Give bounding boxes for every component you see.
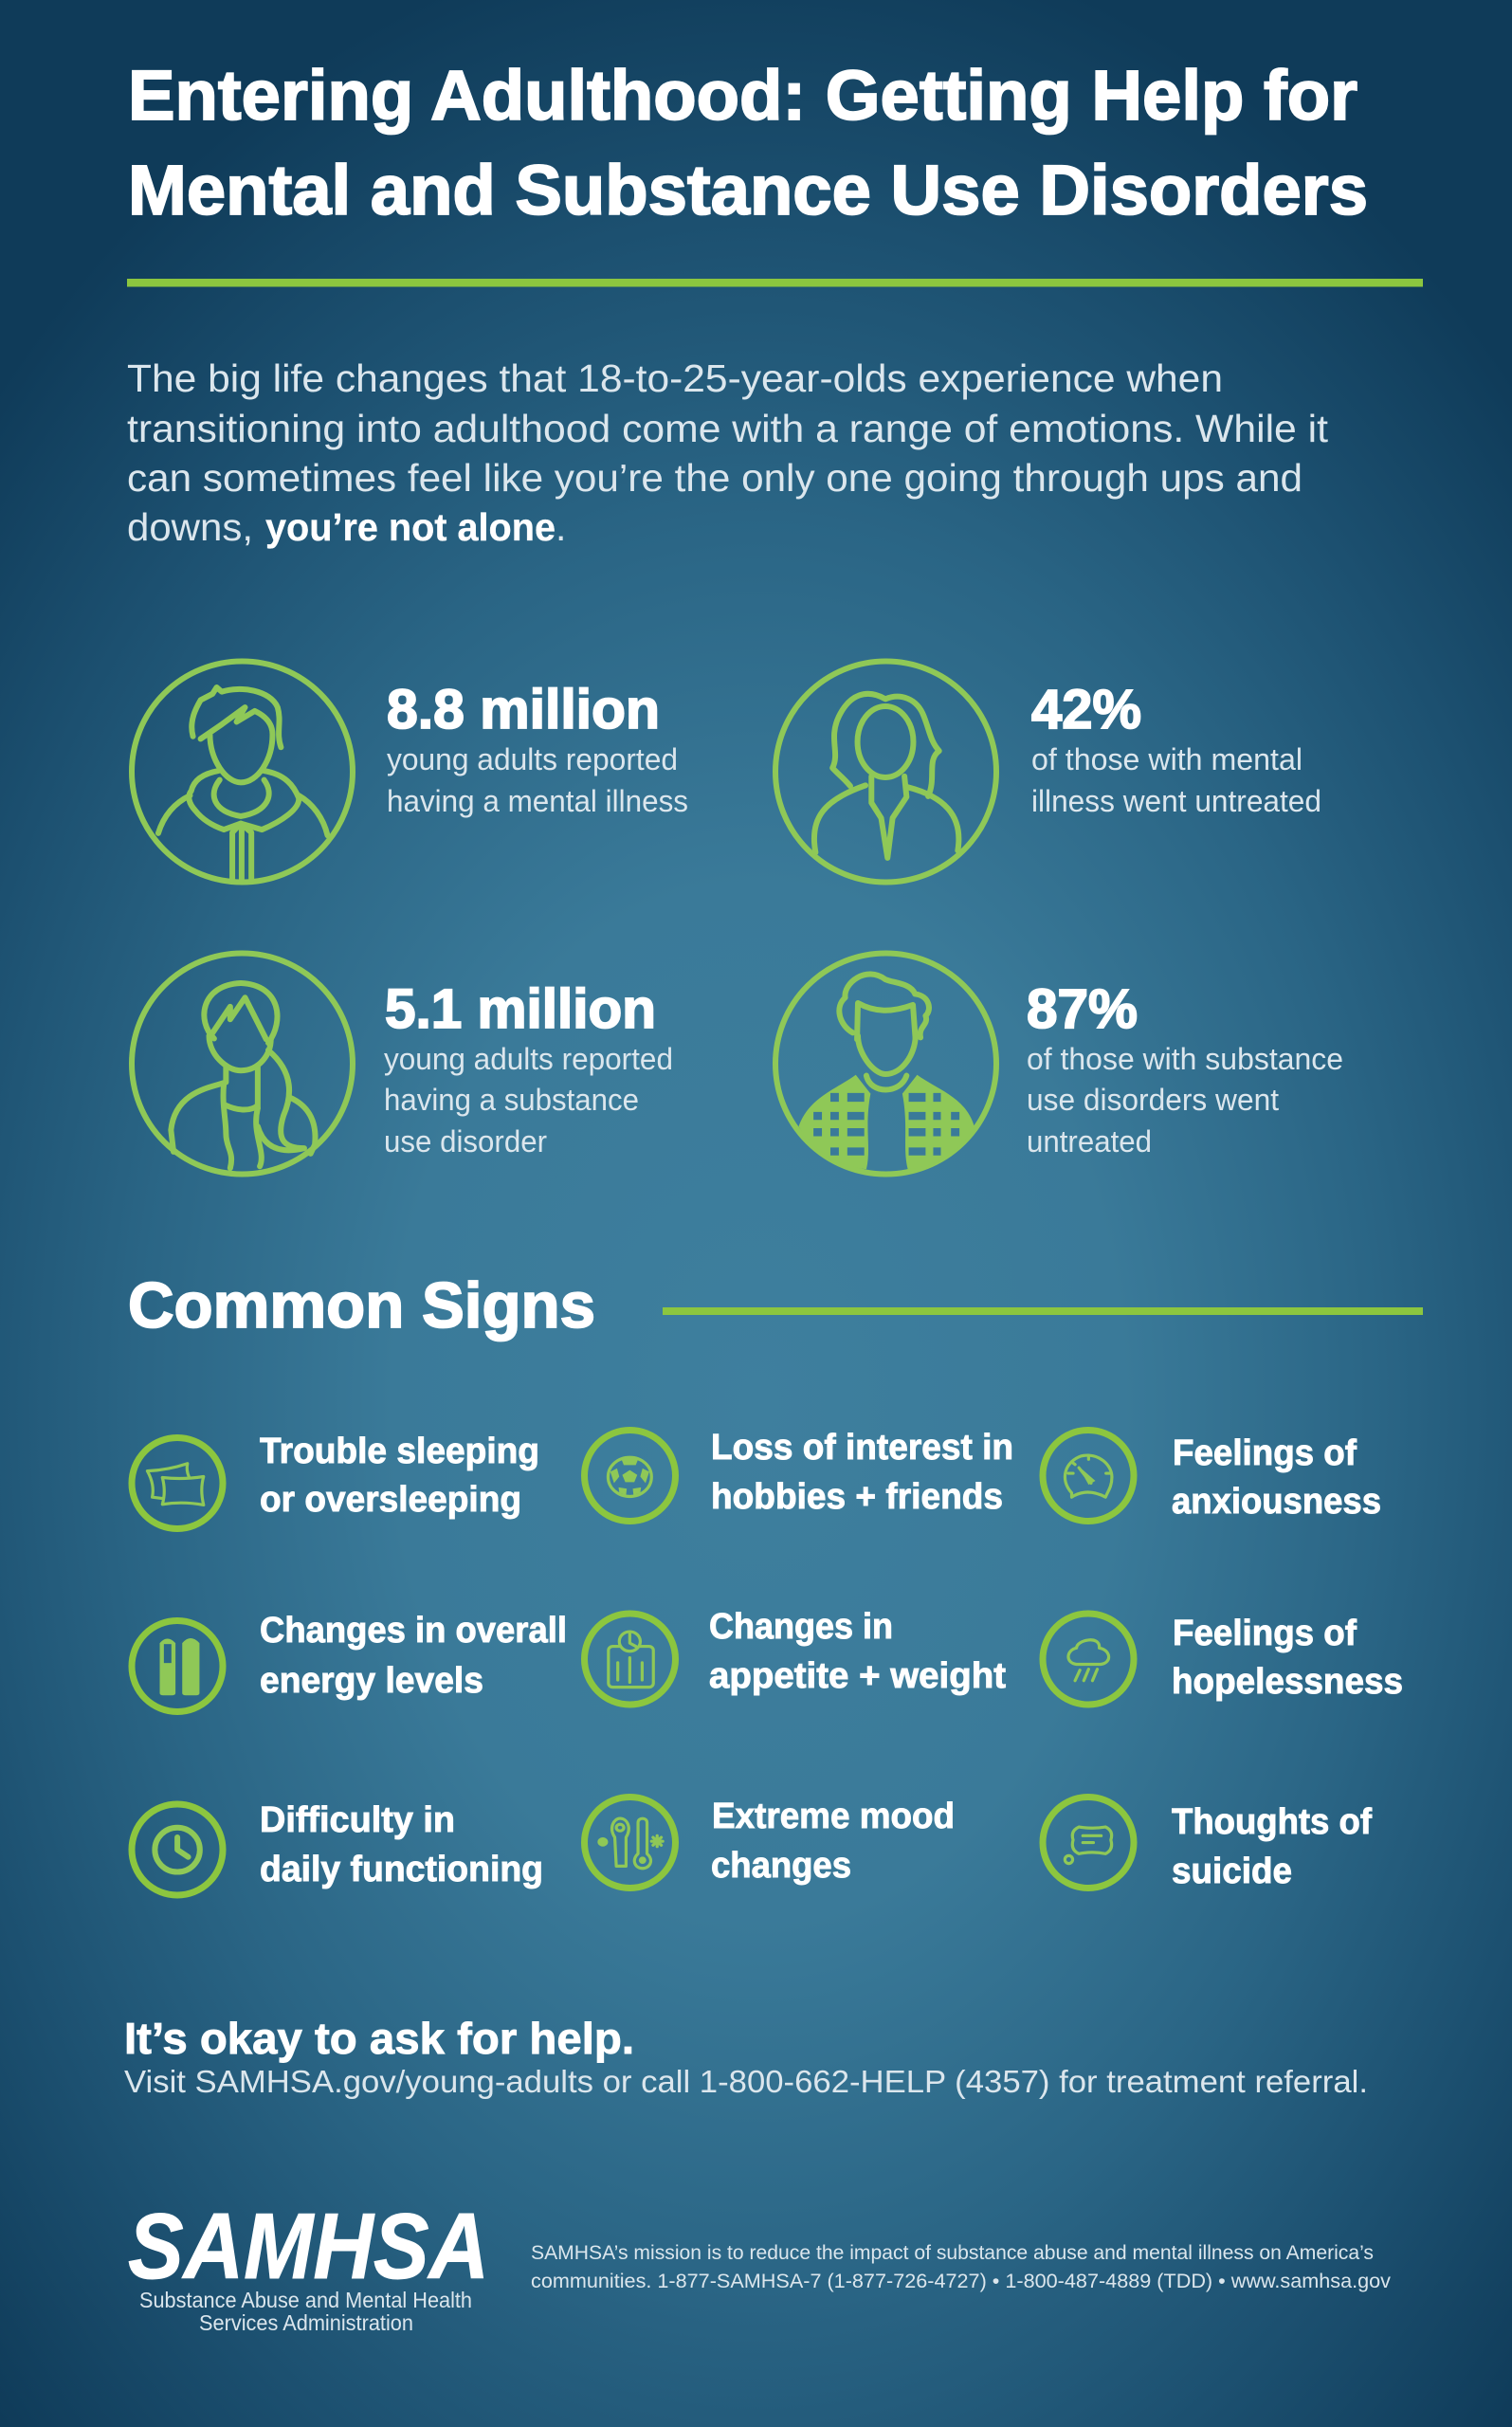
- icon: weight scale: [584, 1614, 675, 1705]
- mission statement: SAMHSA’s mission is to reduce the impact of substance abuse and mental illness on America’s: [531, 2242, 1374, 2264]
- title: [128, 56, 1368, 229]
- mission statement: [531, 2242, 1392, 2292]
- stat description: [384, 1042, 673, 1159]
- icon: clock: [132, 1804, 223, 1895]
- sign text: Trouble sleeping: [260, 1432, 539, 1471]
- sign text: [260, 1432, 539, 1520]
- stat description: [1031, 742, 1321, 818]
- sign: anxiousness: [1043, 1430, 1381, 1522]
- sign: appetite + weight: [584, 1607, 1006, 1705]
- sign text: changes: [711, 1846, 851, 1886]
- sign: loss of interest: [584, 1428, 1013, 1521]
- sign text: Extreme mood: [712, 1797, 955, 1836]
- stat 1: 8.8 million: [132, 662, 688, 882]
- stat description: having a mental illness: [387, 784, 688, 818]
- stat 2: 42%: [775, 662, 1321, 882]
- sign text: hobbies + friends: [711, 1477, 1003, 1517]
- SAMHSA logo: [128, 2194, 489, 2335]
- stat value: 42%: [1031, 679, 1141, 740]
- sign: daily functioning: [132, 1800, 543, 1895]
- intro paragraph: The big life changes that 18-to-25-year-olds experience when: [127, 356, 1223, 400]
- intro paragraph: you’re not alone: [265, 505, 556, 549]
- sign text: [260, 1800, 543, 1889]
- sign text: or oversleeping: [260, 1480, 521, 1520]
- stat description: illness went untreated: [1031, 784, 1321, 818]
- sign text: [1172, 1802, 1372, 1891]
- icon: thought bubble: [1043, 1797, 1134, 1889]
- sign text: anxiousness: [1172, 1482, 1381, 1522]
- icon: rain cloud: [1043, 1614, 1134, 1705]
- title rule: [127, 279, 1423, 286]
- heading: common signs: Common Signs: [128, 1269, 595, 1341]
- stat value: 5.1 million: [385, 978, 656, 1040]
- icon: soccer ball: [584, 1430, 675, 1521]
- sign text: energy levels: [260, 1661, 483, 1701]
- SAMHSA logo: SAMHSA: [128, 2194, 489, 2298]
- mission statement: communities. 1-877-SAMHSA-7 (1-877-726-4727) • 1-800-487-4889 (TDD) • www.samhsa.gov: [531, 2271, 1392, 2292]
- sign: trouble sleeping: [132, 1432, 539, 1528]
- intro paragraph: transitioning into adulthood come with a range of emotions. While it: [127, 407, 1329, 450]
- sign: thoughts of suicide: [1043, 1797, 1372, 1891]
- icon: young man in hoodie: [132, 662, 353, 882]
- icon: woman with wavy hair: [775, 662, 996, 882]
- sign text: Feelings of: [1173, 1433, 1357, 1473]
- sign: mood changes: [584, 1797, 955, 1889]
- heading rule: [663, 1307, 1423, 1315]
- stat description: having a substance: [384, 1083, 639, 1117]
- intro paragraph: can sometimes feel like you’re the only one going through ups and: [127, 456, 1303, 500]
- call to action heading: It’s okay to ask for help.: [124, 2014, 634, 2063]
- sign text: Feelings of: [1173, 1614, 1357, 1653]
- sign: hopelessness: [1043, 1614, 1403, 1705]
- stat description: use disorders went: [1027, 1083, 1279, 1117]
- icon: young man in plaid shirt: [775, 954, 996, 1174]
- stat description: [1027, 1042, 1343, 1159]
- stat 4: 87%: [775, 954, 1343, 1174]
- title: Mental and Substance Use Disorders: [128, 151, 1368, 229]
- sign text: [709, 1607, 1006, 1696]
- stat value: 87%: [1027, 978, 1138, 1040]
- stat description: young adults reported: [387, 742, 678, 776]
- intro paragraph: downs,: [127, 505, 253, 549]
- SAMHSA logo: Services Administration: [199, 2310, 413, 2335]
- intro paragraph: .: [556, 505, 566, 549]
- icon: woman with ponytail: [132, 954, 353, 1174]
- sign text: appetite + weight: [709, 1656, 1006, 1696]
- stat description: untreated: [1027, 1124, 1152, 1159]
- icon: pillows: [132, 1437, 223, 1528]
- title: Entering Adulthood: Getting Help for: [128, 56, 1357, 135]
- sign text: Changes in: [709, 1607, 893, 1647]
- sign text: Loss of interest in: [711, 1428, 1013, 1468]
- icon: batteries: [132, 1621, 223, 1712]
- stat value: 8.8 million: [387, 679, 660, 740]
- stat description: young adults reported: [384, 1042, 673, 1076]
- intro paragraph: [127, 356, 1329, 549]
- sign text: Changes in overall: [260, 1611, 567, 1651]
- sign text: [711, 1797, 955, 1886]
- call to action text: Visit SAMHSA.gov/young-adults or call 1-800-662-HELP (4357) for treatment referral.: [124, 2064, 1368, 2099]
- sign text: suicide: [1172, 1852, 1292, 1891]
- sign text: [1172, 1433, 1381, 1522]
- stat description: [387, 742, 688, 818]
- sign: energy levels: [132, 1611, 567, 1712]
- sign text: hopelessness: [1172, 1662, 1403, 1702]
- stat description: use disorder: [384, 1124, 547, 1159]
- sign text: Thoughts of: [1172, 1802, 1372, 1842]
- sign text: Difficulty in: [260, 1800, 455, 1840]
- stat description: of those with mental: [1031, 742, 1303, 776]
- SAMHSA logo: Substance Abuse and Mental Health: [139, 2288, 472, 2312]
- stat description: of those with substance: [1027, 1042, 1343, 1076]
- sign text: [260, 1611, 567, 1701]
- icon: thermometers: [584, 1797, 675, 1889]
- icon: gauge: [1043, 1430, 1134, 1521]
- sign text: [1172, 1614, 1403, 1702]
- sign text: daily functioning: [260, 1850, 543, 1889]
- sign text: [711, 1428, 1013, 1517]
- stat 3: 5.1 million: [132, 954, 673, 1174]
